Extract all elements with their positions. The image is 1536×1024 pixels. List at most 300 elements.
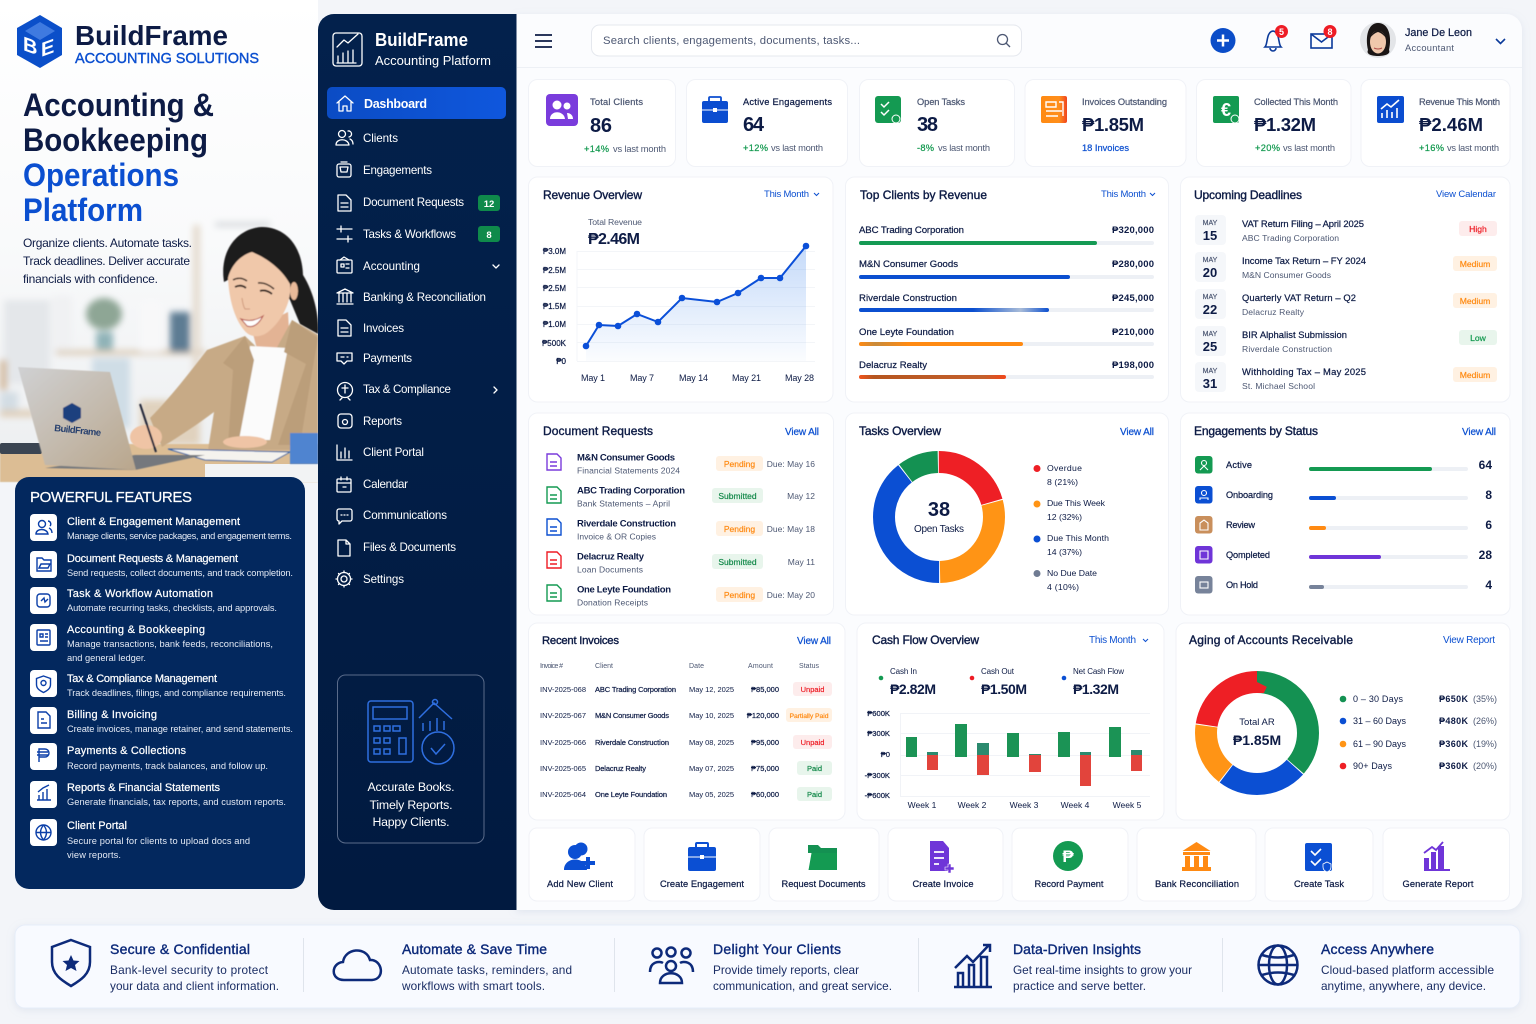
icon: hexagon logo: E bbox=[41, 35, 54, 62]
icon: menu bbox=[535, 35, 552, 47]
status icons bbox=[1195, 456, 1212, 594]
deadline list: Quarterly VAT Return – Q2 bbox=[1242, 292, 1356, 303]
KPI: open tasks: vs last month bbox=[938, 143, 990, 153]
benefit: delight: communication, and great service. bbox=[713, 979, 892, 993]
invoice table header: Amount bbox=[748, 663, 773, 670]
panel: engagements by status: View All bbox=[1462, 427, 1496, 438]
invoice status pills: Paid bbox=[807, 790, 822, 799]
quick action: request documents bbox=[769, 828, 879, 901]
benefit: access bbox=[1258, 941, 1494, 993]
panel: cash flow overview: This Month bbox=[1089, 635, 1136, 646]
invoice rows: ₱95,000 bbox=[751, 738, 779, 747]
date tiles: MAY bbox=[1203, 294, 1218, 301]
KPI: invoices outstanding: 18 Invoices bbox=[1082, 143, 1129, 153]
panel: revenue overview: Revenue Overview bbox=[543, 188, 642, 202]
platform name: BuildFrame bbox=[375, 29, 468, 50]
search box: Search clients, engagements, documents, tasks... bbox=[603, 35, 860, 47]
nav badge: tasks: 8 bbox=[486, 230, 492, 241]
invoice rows: One Leyte Foundation bbox=[595, 790, 667, 799]
panel: powerful features bbox=[15, 477, 305, 889]
invoice rows: ABC Trading Corporation bbox=[595, 685, 676, 694]
bar list: clients: ₱245,000 bbox=[1112, 293, 1154, 304]
invoice rows: INV-2025-067 bbox=[540, 711, 586, 720]
status labels: Qompleted bbox=[1226, 550, 1270, 560]
donut chart: aging: Total AR bbox=[1239, 717, 1275, 728]
legend: aging: 90+ Days bbox=[1353, 761, 1392, 771]
invoice rows: Riverdale Construction bbox=[595, 738, 669, 747]
KPI: total clients bbox=[528, 80, 676, 166]
hero description: Organize clients. Automate tasks. bbox=[23, 236, 192, 250]
icon: task clipboard bbox=[1305, 843, 1332, 872]
user name and role bbox=[1405, 27, 1472, 53]
hero heading: Operations bbox=[23, 157, 179, 193]
date tiles: 22 bbox=[1203, 302, 1217, 317]
hero photo: accountant at laptop bbox=[0, 0, 318, 482]
panel: cash flow overview: Cash Flow Overview bbox=[872, 633, 979, 647]
feature list text: Tax & Compliance Management bbox=[67, 673, 217, 685]
invoice status pills: Paid bbox=[807, 764, 822, 773]
KPI: collected this month bbox=[1196, 80, 1351, 166]
KPI: open tasks: 38 bbox=[917, 114, 938, 136]
nav menu items: Files & Documents bbox=[363, 541, 456, 554]
legend: aging: ₱650K bbox=[1439, 694, 1468, 704]
bar list: clients bbox=[859, 225, 1154, 379]
icon: briefcase bbox=[702, 97, 728, 123]
icon: revenue chart bbox=[1377, 96, 1404, 123]
request list bbox=[577, 452, 685, 608]
nav menu items: Reports bbox=[363, 415, 402, 428]
icon: add button bbox=[1210, 28, 1236, 53]
hero heading: Accounting & bbox=[23, 87, 214, 123]
feature list text: Automate recurring tasks, checklists, and approvals. bbox=[67, 603, 277, 613]
feature list text: Reports & Financial Statements bbox=[67, 782, 220, 794]
bar chart: cash flow: Week 4 bbox=[1061, 800, 1090, 810]
request list: M&N Consumer Goods bbox=[577, 452, 675, 464]
legend: aging: ₱360K bbox=[1439, 739, 1468, 749]
feature list text: Record payments, track balances, and follow up. bbox=[67, 761, 268, 771]
KPI: open tasks bbox=[860, 80, 1014, 166]
status counts bbox=[1479, 458, 1492, 592]
blazer bbox=[150, 320, 318, 450]
line chart: revenue: ₱1.5M bbox=[543, 302, 566, 311]
cash flow summary: ₱1.32M bbox=[1073, 681, 1119, 697]
legend: tasks: Due This Week bbox=[1047, 498, 1106, 508]
KPI: collected this month: vs last month bbox=[1283, 143, 1335, 153]
legend: tasks bbox=[1034, 463, 1109, 592]
line chart: revenue: ₱2.5M bbox=[543, 266, 566, 275]
bar chart: cash flow bbox=[865, 709, 1150, 810]
cash flow summary: Cash Out bbox=[981, 667, 1015, 676]
bar chart: cash flow: Week 1 bbox=[908, 800, 937, 810]
panel: aging of accounts receivable bbox=[1176, 623, 1510, 820]
promo text: Timely Reports. bbox=[370, 798, 452, 812]
bar chart: cash flow: Week 2 bbox=[958, 800, 987, 810]
feature list text: Accounting & Bookkeeping bbox=[67, 624, 205, 636]
date tiles: MAY bbox=[1203, 331, 1218, 338]
features heading: POWERFUL FEATURES bbox=[30, 489, 192, 506]
deadline list: VAT Return Filing – April 2025 bbox=[1242, 218, 1364, 229]
nav menu items: Document Requests bbox=[363, 196, 464, 209]
promo text: Happy Clients. bbox=[372, 815, 450, 829]
line chart: revenue: ₱0 bbox=[556, 357, 567, 366]
due dates: May 11 bbox=[788, 557, 815, 567]
icon: hexagon logo bbox=[17, 15, 62, 68]
icon: hexagon logo: B bbox=[23, 33, 37, 60]
KPI: active engagements: +12% bbox=[743, 143, 768, 153]
panel: top clients by revenue bbox=[846, 177, 1168, 402]
benefit: insights: Get real-time insights to grow your bbox=[1013, 963, 1192, 977]
status labels: On Hold bbox=[1226, 580, 1258, 590]
panel: top clients by revenue: This Month bbox=[1101, 189, 1146, 200]
benefit: secure: your data and client information. bbox=[110, 979, 279, 993]
deadline list: BIR Alphalist Submission bbox=[1242, 329, 1347, 340]
benefit: automate: Automate tasks, reminders, and bbox=[402, 963, 572, 977]
invoice rows: May 10, 2025 bbox=[689, 711, 734, 720]
priority badges: Medium bbox=[1460, 259, 1490, 269]
invoice rows: INV-2025-065 bbox=[540, 764, 586, 773]
KPI: total clients: Total Clients bbox=[590, 97, 643, 107]
nav badge: document requests bbox=[478, 195, 500, 211]
bar list: clients: ₱320,000 bbox=[1112, 225, 1154, 236]
quick action: bank reconciliation bbox=[1137, 828, 1256, 901]
promo box bbox=[338, 675, 484, 843]
benefit: secure bbox=[52, 940, 279, 993]
invoice table header: Invoice # bbox=[540, 663, 563, 670]
feature list text: Generate financials, tax reports, and custom reports. bbox=[67, 797, 286, 807]
bar chart: cash flow: ₱600K bbox=[867, 709, 890, 718]
nav icons bbox=[336, 130, 499, 587]
panel: document requests: View All bbox=[785, 427, 819, 438]
status pills: Submitted bbox=[718, 557, 757, 567]
feature icons bbox=[30, 514, 57, 846]
quick action: record payment: Record Payment bbox=[1034, 879, 1104, 889]
feature list text: Payments & Collections bbox=[67, 745, 186, 757]
neck bbox=[252, 312, 290, 368]
status labels: Onboarding bbox=[1226, 490, 1273, 500]
bar chart: cash flow: -₱300K bbox=[865, 771, 890, 780]
legend: aging: 31 – 60 Days bbox=[1353, 716, 1406, 726]
benefit: secure: Secure & Confidential bbox=[110, 941, 250, 957]
bar list: clients: M&N Consumer Goods bbox=[859, 259, 958, 270]
quick action: request documents: Request Documents bbox=[782, 879, 866, 889]
panel: document requests bbox=[528, 413, 834, 615]
KPI: invoices outstanding bbox=[1025, 80, 1186, 166]
invoice rows bbox=[540, 685, 779, 799]
panel: aging of accounts receivable: View Report bbox=[1443, 635, 1495, 646]
status counts: 8 bbox=[1485, 488, 1492, 502]
bar chart: cash flow: ₱300K bbox=[867, 729, 890, 738]
invoice status pills: Unpaid bbox=[801, 738, 824, 747]
panel: tasks overview bbox=[846, 413, 1168, 615]
status pills: Submitted bbox=[718, 491, 757, 501]
quick action: generate report bbox=[1383, 828, 1510, 901]
legend: aging: ₱480K bbox=[1439, 716, 1468, 726]
quick action: record payment bbox=[1012, 828, 1128, 901]
benefit: secure: Bank-level security to protect bbox=[110, 963, 269, 977]
benefit: access: Access Anywhere bbox=[1321, 941, 1434, 957]
nav menu items: Tax & Compliance bbox=[363, 383, 451, 396]
KPI: active engagements: Active Engagements bbox=[743, 97, 832, 107]
line chart: revenue: ₱3.0M bbox=[543, 247, 566, 256]
request list: One Leyte Foundation bbox=[577, 584, 671, 596]
bar list: clients: ABC Trading Corporation bbox=[859, 225, 964, 236]
icon: currency: € bbox=[1221, 100, 1231, 120]
icon: report chart bbox=[1424, 842, 1450, 871]
priority badges bbox=[1453, 221, 1497, 382]
deadline list: St. Michael School bbox=[1242, 381, 1315, 391]
KPI: open tasks: -8% bbox=[917, 143, 934, 153]
icon: peso coin: ₱ bbox=[1062, 847, 1074, 866]
benefit: insights: practice and serve better. bbox=[1013, 979, 1146, 993]
nav menu items: Accounting bbox=[363, 260, 420, 273]
donut chart: aging bbox=[1206, 682, 1308, 784]
quick action: create task bbox=[1265, 828, 1373, 901]
legend: aging: 61 – 90 Days bbox=[1353, 739, 1406, 749]
date tiles: 20 bbox=[1203, 265, 1217, 280]
legend: tasks: 12 (32%) bbox=[1047, 512, 1082, 522]
KPI: revenue this month: ₱2.46M bbox=[1419, 114, 1483, 135]
cash flow summary: ₱2.82M bbox=[890, 681, 936, 697]
icon: folder bbox=[808, 845, 837, 870]
bar list: clients: Riverdale Construction bbox=[859, 293, 957, 304]
due dates bbox=[767, 459, 815, 600]
feature list text: and general ledger. bbox=[67, 653, 146, 663]
icon: notifications bell bbox=[1265, 25, 1288, 51]
panel: upcoming deadlines: Upcoming Deadlines bbox=[1194, 188, 1302, 202]
feature list text: Billing & Invoicing bbox=[67, 709, 157, 721]
brand name: BuildFrame bbox=[75, 20, 228, 51]
benefit: automate: Automate & Save Time bbox=[402, 941, 547, 957]
status labels: Review bbox=[1226, 520, 1255, 530]
legend: aging: ₱360K bbox=[1439, 761, 1468, 771]
line chart: revenue: ₱500K bbox=[542, 339, 567, 348]
line chart: revenue: ₱1.0M bbox=[543, 320, 566, 329]
request list: Bank Statements – April bbox=[577, 498, 670, 508]
feature list text: Manage clients, service packages, and engagement terms. bbox=[67, 531, 292, 541]
panel: revenue overview bbox=[528, 177, 833, 402]
panel: upcoming deadlines bbox=[1180, 177, 1510, 402]
panel: top clients by revenue: Top Clients by Revenue bbox=[860, 188, 987, 202]
invoice rows: M&N Consumer Goods bbox=[595, 711, 669, 720]
panel: engagements by status: Engagements by Status bbox=[1194, 424, 1318, 438]
deadline list: M&N Consumer Goods bbox=[1242, 270, 1331, 280]
donut chart: tasks bbox=[884, 462, 994, 572]
line chart: revenue: May 21 bbox=[732, 373, 761, 383]
deadline list: ABC Trading Corporation bbox=[1242, 233, 1339, 243]
legend: aging: (20%) bbox=[1473, 761, 1497, 771]
due dates: Due: May 20 bbox=[767, 590, 815, 600]
feature list text: Task & Workflow Automation bbox=[67, 588, 213, 600]
hero description: Track deadlines. Deliver accurate bbox=[23, 254, 190, 268]
icon: checklist bbox=[875, 96, 901, 123]
promo text bbox=[368, 780, 454, 829]
KPI: revenue this month: vs last month bbox=[1447, 143, 1499, 153]
date tiles: 25 bbox=[1203, 339, 1217, 354]
quick action: add new client: Add New Client bbox=[547, 879, 613, 889]
legend: tasks: 4 (10%) bbox=[1047, 582, 1079, 592]
nav menu items: Engagements bbox=[363, 164, 432, 177]
icon: invoice bbox=[930, 841, 954, 873]
benefits strip bbox=[15, 925, 1520, 1008]
legend: aging: (19%) bbox=[1473, 739, 1497, 749]
status pills bbox=[712, 456, 763, 602]
invoice rows: INV-2025-066 bbox=[540, 738, 586, 747]
panel: recent invoices bbox=[528, 623, 845, 820]
date tiles: MAY bbox=[1203, 257, 1218, 264]
nav menu items: Client Portal bbox=[363, 446, 424, 459]
panel: upcoming deadlines: View Calendar bbox=[1436, 189, 1496, 200]
cash flow summary: Cash In bbox=[890, 667, 917, 676]
hero heading bbox=[23, 87, 214, 228]
line chart: revenue: ₱2.5M bbox=[543, 284, 566, 293]
benefit: access: Cloud-based platform accessible bbox=[1321, 963, 1494, 977]
bar list: clients: Delacruz Realty bbox=[859, 360, 927, 371]
hero description: financials with confidence. bbox=[23, 272, 158, 286]
hands and notebook bbox=[130, 425, 162, 449]
icon: briefcase bbox=[688, 843, 716, 871]
nav menu items: Tasks & Workflows bbox=[363, 228, 456, 241]
nav menu items: Calendar bbox=[363, 478, 408, 491]
quick action: generate report: Generate Report bbox=[1402, 879, 1474, 889]
KPI: revenue this month: +16% bbox=[1419, 143, 1444, 153]
KPI: total clients: vs last month bbox=[613, 144, 666, 154]
deadline list bbox=[1242, 218, 1366, 391]
nav menu items: Banking & Reconciliation bbox=[363, 291, 486, 304]
request list: ABC Trading Corporation bbox=[577, 486, 685, 496]
invoice rows: Delacruz Realty bbox=[595, 764, 646, 773]
quick action: create invoice: Create Invoice bbox=[912, 879, 974, 889]
bar list: clients: ₱198,000 bbox=[1112, 360, 1154, 371]
user name and role: Accountant bbox=[1405, 43, 1454, 53]
invoice status pills bbox=[786, 682, 832, 801]
feature list text: Manage transactions, bank feeds, reconciliations, bbox=[67, 639, 273, 649]
hero heading: Bookkeeping bbox=[23, 122, 208, 158]
KPI: active engagements bbox=[686, 80, 848, 166]
panel: tasks overview: Tasks Overview bbox=[859, 424, 941, 438]
status counts: 28 bbox=[1479, 548, 1492, 562]
request list: Loan Documents bbox=[577, 564, 643, 574]
KPI: total clients: 86 bbox=[590, 115, 612, 137]
feature list text: Secure portal for clients to upload docs and bbox=[67, 836, 250, 846]
date tiles: 31 bbox=[1203, 376, 1217, 391]
invoice rows: ₱75,000 bbox=[751, 764, 779, 773]
invoice table header: Client bbox=[595, 663, 613, 670]
hero heading: Platform bbox=[23, 192, 143, 228]
cash flow summary: ₱1.50M bbox=[981, 681, 1027, 697]
benefit: automate: workflows with smart tools. bbox=[401, 979, 545, 993]
nav menu items: Settings bbox=[363, 573, 404, 586]
invoice table header bbox=[540, 663, 820, 670]
legend: tasks: No Due Date bbox=[1047, 568, 1097, 578]
panel: revenue overview: Total Revenue bbox=[588, 217, 642, 227]
feature list text: Create invoices, manage retainer, and send statements. bbox=[67, 724, 293, 734]
hero photo: accountant at laptop: BuildFrame bbox=[54, 423, 102, 439]
icon: platform logo bbox=[333, 33, 362, 66]
invoice rows: May 08, 2025 bbox=[689, 738, 734, 747]
status pills: Pending bbox=[724, 459, 755, 469]
hair bbox=[223, 227, 318, 334]
status pills: Pending bbox=[724, 590, 755, 600]
quick action: create invoice bbox=[888, 828, 1003, 901]
face bbox=[228, 252, 290, 336]
panel: document requests: Document Requests bbox=[543, 424, 653, 438]
benefit: insights bbox=[954, 941, 1192, 993]
icon: messages envelope: 8 bbox=[1327, 27, 1333, 37]
due dates: May 12 bbox=[787, 491, 815, 501]
status bars bbox=[1309, 467, 1468, 589]
nav badge: document requests: 12 bbox=[484, 199, 494, 210]
shirt bbox=[236, 346, 288, 440]
icon: currency bbox=[1213, 96, 1239, 123]
line chart: revenue: May 1 bbox=[581, 373, 605, 383]
benefit: automate bbox=[334, 941, 572, 993]
benefit: delight bbox=[650, 941, 892, 993]
nav menu items: Invoices bbox=[363, 322, 404, 335]
document icons bbox=[547, 454, 561, 601]
panel: recent invoices: Recent Invoices bbox=[542, 635, 619, 647]
feature list text: Document Requests & Management bbox=[67, 553, 238, 565]
cash flow summary: Net Cash Flow bbox=[1073, 667, 1124, 676]
invoice rows: May 07, 2025 bbox=[689, 764, 734, 773]
feature list text: Client Portal bbox=[67, 820, 127, 832]
date tiles bbox=[1195, 215, 1226, 392]
panel: revenue overview: ₱2.46M bbox=[588, 231, 640, 248]
nav menu items: Clients bbox=[363, 132, 398, 145]
legend: aging: 0 – 30 Days bbox=[1353, 694, 1404, 704]
invoice rows: INV-2025-068 bbox=[540, 685, 586, 694]
legend: tasks: 14 (37%) bbox=[1047, 547, 1082, 557]
nav badge: tasks bbox=[478, 226, 500, 242]
due dates: Due: May 18 bbox=[767, 524, 815, 534]
priority badges: High bbox=[1469, 224, 1487, 234]
search box bbox=[592, 25, 1022, 56]
KPI: invoices outstanding: ₱1.85M bbox=[1082, 114, 1144, 135]
icon: notifications bell: 5 bbox=[1279, 27, 1284, 37]
status counts: 64 bbox=[1479, 458, 1492, 472]
invoice table header: Status bbox=[799, 663, 820, 670]
panel: recent invoices: View All bbox=[797, 636, 831, 647]
invoice table header: Date bbox=[689, 663, 704, 670]
icon: clients bbox=[546, 94, 578, 126]
nav item: dashboard active bbox=[327, 87, 506, 119]
date tiles: MAY bbox=[1203, 368, 1218, 375]
user avatar bbox=[1360, 22, 1396, 58]
feature list text: Send requests, collect documents, and track completion. bbox=[67, 568, 293, 578]
quick action: create engagement bbox=[644, 828, 760, 901]
panel: revenue overview: This Month bbox=[764, 189, 809, 200]
priority badges: Medium bbox=[1460, 370, 1490, 380]
bar chart: cash flow: Week 3 bbox=[1010, 800, 1039, 810]
request list: Riverdale Construction bbox=[577, 518, 676, 530]
quick action: create task: Create Task bbox=[1294, 879, 1344, 889]
donut chart: aging: ₱1.85M bbox=[1233, 732, 1281, 748]
donut chart: tasks: 38 bbox=[928, 499, 950, 521]
feature list text: Client & Engagement Management bbox=[67, 516, 240, 528]
request list: Invoice & OR Copies bbox=[577, 532, 656, 542]
KPI: active engagements: 64 bbox=[743, 114, 765, 136]
legend: aging: (26%) bbox=[1473, 716, 1497, 726]
status counts: 4 bbox=[1485, 578, 1492, 592]
brand logo bbox=[17, 15, 259, 68]
nav menu items: Payments bbox=[363, 352, 412, 365]
panel: aging of accounts receivable: Aging of Accounts Receivable bbox=[1189, 633, 1353, 647]
panel: cash flow overview bbox=[857, 623, 1164, 820]
legend: tasks: Overdue bbox=[1047, 463, 1082, 473]
panel: tasks overview: View All bbox=[1120, 427, 1154, 438]
status labels: Active bbox=[1226, 460, 1252, 470]
top bar bbox=[517, 22, 1522, 68]
legend: aging bbox=[1340, 694, 1497, 771]
